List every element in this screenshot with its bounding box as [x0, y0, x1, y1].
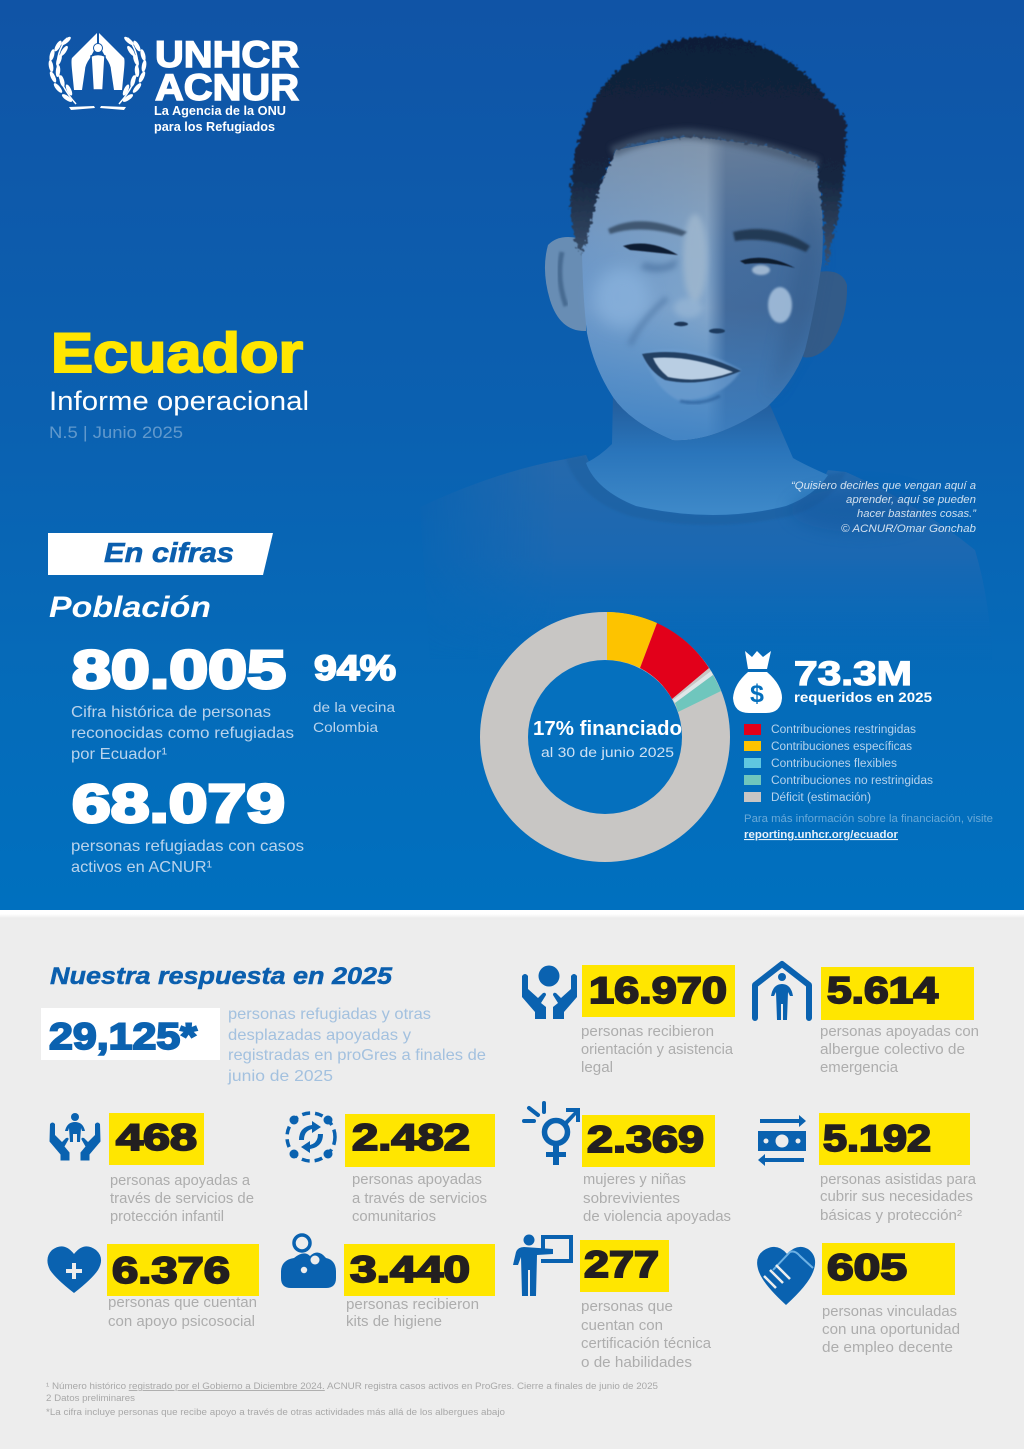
legend: funding types [744, 724, 933, 804]
stat: 68.079: activos en ACNUR¹ [71, 859, 212, 876]
stat: 605 employment: de empleo decente [822, 1340, 953, 1356]
stat: 6.376 psychosocial: con apoyo psicosocial [108, 1314, 255, 1330]
stat: 5.192 cash assistance: personas asistidas para [820, 1172, 977, 1188]
stat: 5.192 cash assistance [758, 1113, 977, 1224]
icon: UNHCR emblem [48, 33, 147, 110]
left eye [623, 243, 678, 255]
left brow [608, 221, 687, 236]
stat: 2.369 gender violence: de violencia apoyadas [583, 1209, 731, 1225]
stat: 5.614 shelter: personas apoyadas con [820, 1024, 979, 1040]
stat: 277 certification: personas que [581, 1299, 673, 1315]
stat: 16.970 legal assistance: personas recibieron [581, 1024, 714, 1040]
stat: 16.970 legal assistance: 16.970 [589, 970, 727, 1011]
face [582, 136, 823, 440]
title block: Informe operacional [49, 386, 309, 416]
stat: 2.369 gender violence: mujeres y niñas [583, 1172, 686, 1188]
stat: 3.440 hygiene: personas recibieron [346, 1297, 479, 1313]
stat: 277 certification: o de habilidades [581, 1355, 692, 1371]
mouth and teeth [642, 349, 741, 401]
footnotes: ¹ Número histórico registrado por el Gobierno a Diciembre 2024. ACNUR registra casos activos en ProGres. Cierre a finales de junio de 2025 [46, 1381, 658, 1391]
quote shadow [790, 488, 930, 532]
logo: UNHCR ACNUR: para los Refugiados [154, 120, 275, 134]
stat: 94% [313, 649, 396, 735]
stat: 6.376 psychosocial: personas que cuentan [108, 1295, 257, 1311]
stat: 94%: Colombia [313, 719, 378, 735]
hairline fade [612, 134, 818, 164]
stat: 94%: de la vecina [313, 699, 395, 715]
stat: 605 employment [757, 1243, 960, 1356]
banner: En cifras [48, 533, 273, 575]
funding requirement [794, 655, 932, 705]
icon: handshake heart [757, 1247, 815, 1305]
stat: 16.970 legal assistance [522, 965, 735, 1076]
stat: 80.005: Cifra histórica de personas [71, 704, 271, 721]
heading: Población: Población [49, 591, 211, 624]
title block: N.5 | Junio 2025 [49, 423, 183, 442]
heading: Nuestra respuesta: Nuestra respuesta en 2025 [50, 963, 392, 990]
photo caption: “Quisiero decirles que vengan aquí a [791, 480, 976, 492]
photo caption: aprender, aquí se pueden [846, 494, 976, 506]
stat: 68.079: personas refugiadas con casos [71, 838, 304, 855]
stat: 2.369 gender violence [524, 1103, 731, 1225]
stat: 5.192 cash assistance: cubrir sus necesidades [820, 1189, 973, 1205]
stat: 3.440 hygiene: 3.440 [350, 1249, 470, 1290]
light patches on cheek [768, 287, 792, 323]
title block: Ecuador [51, 321, 303, 384]
cheek light and shadow [594, 268, 650, 328]
stat: 2.482 community: personas apoyadas [352, 1172, 482, 1188]
population figures [71, 640, 396, 876]
stat: 2.482 community [287, 1113, 495, 1225]
stat: 468 child protection: 468 [116, 1117, 197, 1158]
icon: person at board [513, 1234, 573, 1296]
stat: 29,125: personas refugiadas y otras [228, 1006, 431, 1023]
footnotes: *La cifra incluye personas que recibe apoyo a través de otras actividades más allá de los albergues abajo [46, 1407, 505, 1417]
stat: 468 child protection [50, 1113, 254, 1225]
stat: 5.614 shelter: emergencia [820, 1060, 899, 1076]
legend: funding types: Contribuciones no restringidas [771, 775, 933, 787]
footnotes: 2 Datos preliminares [46, 1393, 136, 1403]
stat: 2.369 gender violence: 2.369 [587, 1119, 704, 1160]
stat: 3.440 hygiene: kits de higiene [346, 1314, 442, 1330]
right brow [733, 229, 810, 252]
logo: UNHCR ACNUR: UNHCR [155, 34, 299, 75]
donut chart: funding: 17% financiado [533, 718, 682, 740]
icon: cash transfer [758, 1115, 806, 1166]
right eye [740, 258, 795, 268]
footnotes [46, 1381, 658, 1417]
neck [586, 395, 828, 515]
stat: 68.079: 68.079 [72, 774, 285, 834]
stat: 2.482 community: 2.482 [352, 1117, 470, 1158]
legend: funding types: Contribuciones flexibles [771, 758, 897, 770]
stat: 5.614 shelter: 5.614 [827, 970, 939, 1011]
banner: En cifras: En cifras [104, 537, 234, 568]
funding link note: reporting.unhcr.org/ecuador [744, 829, 899, 841]
donut chart: funding [480, 612, 730, 862]
stat: 5.192 cash assistance: 5.192 [823, 1118, 931, 1159]
icon: community cycle [287, 1113, 335, 1161]
stat: 16.970 legal assistance: legal [581, 1060, 613, 1076]
funding requirement: 73.3M [794, 655, 912, 693]
collar [566, 455, 846, 525]
stat: 3.440 hygiene [281, 1235, 495, 1330]
legend: funding types: Contribuciones restringidas [771, 724, 916, 736]
photo: smiling boy portrait [420, 37, 992, 660]
photo caption: hacer bastantes cosas.” [857, 508, 977, 520]
stat: 277 certification: certificación técnica [581, 1336, 712, 1352]
funding link note: Para más información sobre la financiación, visite [744, 813, 993, 825]
photo caption: © ACNUR/Omar Gonchab [841, 523, 976, 535]
funding requirement: requeridos en 2025 [794, 689, 932, 705]
stat: 468 child protection: través de servicios de [110, 1191, 254, 1207]
funding link note [744, 813, 993, 841]
stat: 605 employment: personas vinculadas [822, 1304, 957, 1320]
stat: 29,125: registradas en proGres a finales de [228, 1047, 486, 1064]
icon: soap and bubbles [281, 1235, 336, 1288]
icon: money bag: $ [750, 680, 764, 708]
stat: 80.005: reconocidas como refugiadas [71, 725, 294, 742]
icon: heart with plus [47, 1246, 101, 1293]
stat: 29,125 [41, 1006, 486, 1085]
stat: 68.079 [71, 774, 304, 876]
stat: 94%: 94% [314, 649, 396, 688]
logo: UNHCR ACNUR: ACNUR [155, 67, 299, 108]
stat: 80.005: 80.005 [72, 640, 286, 700]
stat: 2.482 community: comunitarios [352, 1209, 436, 1225]
stat: 277 certification: 277 [584, 1244, 659, 1285]
right ear [803, 271, 847, 358]
panel: blue header background [0, 0, 1024, 910]
stat: 5.614 shelter: albergue colectivo de [820, 1042, 965, 1058]
stat: 605 employment: con una oportunidad [822, 1322, 960, 1338]
stat: 29,125: 29,125* [49, 1016, 198, 1057]
stat: 5.614 shelter [755, 964, 979, 1076]
stat: 16.970 legal assistance: orientación y asistencia [581, 1042, 734, 1058]
stat: 80.005 [71, 640, 294, 763]
stat: 5.192 cash assistance: básicas y protección² [820, 1208, 962, 1224]
logo: UNHCR ACNUR [48, 33, 299, 134]
icon: hands holding child [50, 1113, 100, 1160]
nose highlight [674, 298, 702, 318]
title block [49, 321, 309, 442]
stat: 605 employment: 605 [827, 1247, 907, 1288]
stat: 2.482 community: a través de servicios [352, 1191, 487, 1207]
icon: gender symbol [524, 1103, 580, 1165]
shirt [456, 455, 985, 594]
stat: 80.005: por Ecuador¹ [71, 746, 167, 763]
stat: 277 certification: cuentan con [581, 1318, 663, 1334]
hair [570, 37, 847, 268]
stat: 29,125: junio de 2025 [227, 1068, 333, 1085]
donut chart: funding: al 30 de junio 2025 [541, 744, 674, 760]
nostrils [674, 322, 688, 326]
stat: 6.376 psychosocial: 6.376 [112, 1250, 230, 1291]
icon: money bag [733, 651, 782, 713]
icon: hands holding circle [522, 966, 577, 1019]
stat: 468 child protection: protección infantil [110, 1209, 224, 1225]
icon: person in shelter [755, 964, 809, 1020]
legend: funding types: Contribuciones específicas [771, 741, 912, 753]
stat: 277 certification [513, 1234, 712, 1371]
left ear [545, 237, 586, 331]
stat: 6.376 psychosocial [47, 1244, 259, 1330]
stat: 29,125: desplazadas apoyadas y [228, 1027, 411, 1044]
panel: response [0, 910, 1024, 1449]
logo: UNHCR ACNUR: La Agencia de la ONU [154, 104, 286, 118]
legend: funding types: Déficit (estimación) [771, 792, 871, 804]
stat: 468 child protection: personas apoyadas a [110, 1173, 251, 1189]
photo caption [791, 480, 977, 535]
stat: 2.369 gender violence: sobrevivientes [583, 1191, 680, 1207]
